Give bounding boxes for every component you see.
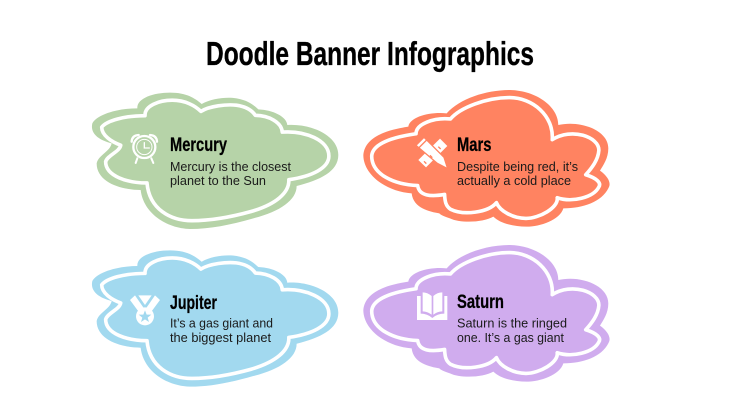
heading: Mercury: Mercury [170, 135, 227, 156]
cloud: Saturn [363, 245, 610, 382]
panel: Mercury [92, 93, 338, 229]
heading: Jupiter: Jupiter [170, 293, 217, 314]
text: Jupiter description: It’s a gas giant and [170, 316, 273, 331]
text: Saturn description: Saturn is the ringed [457, 316, 567, 331]
cloud: Jupiter [92, 250, 338, 387]
heading: Mars: Mars [457, 135, 492, 156]
cloud: Mercury [92, 93, 338, 229]
icon: alarm clock [132, 135, 157, 163]
text: Mercury description: Mercury is the closest [170, 159, 291, 174]
panel: Jupiter [92, 250, 338, 387]
title: Doodle Banner Infographics [206, 35, 534, 72]
text: Mercury description: planet to the Sun [170, 173, 266, 188]
cloud: Mars [363, 90, 610, 227]
text: Jupiter description: the biggest planet [170, 330, 271, 345]
icon: pencil and ruler [416, 137, 448, 169]
heading: Saturn: Saturn [457, 292, 504, 313]
panel: Saturn [363, 245, 610, 382]
text: Mars description: Despite being red, it’s [457, 159, 578, 174]
icon: medal [130, 295, 160, 325]
panel: Mars [363, 90, 610, 227]
icon: open book [417, 292, 447, 320]
text: Mars description: actually a cold place [457, 173, 571, 188]
text: Saturn description: one. It’s a gas giant [457, 330, 564, 345]
